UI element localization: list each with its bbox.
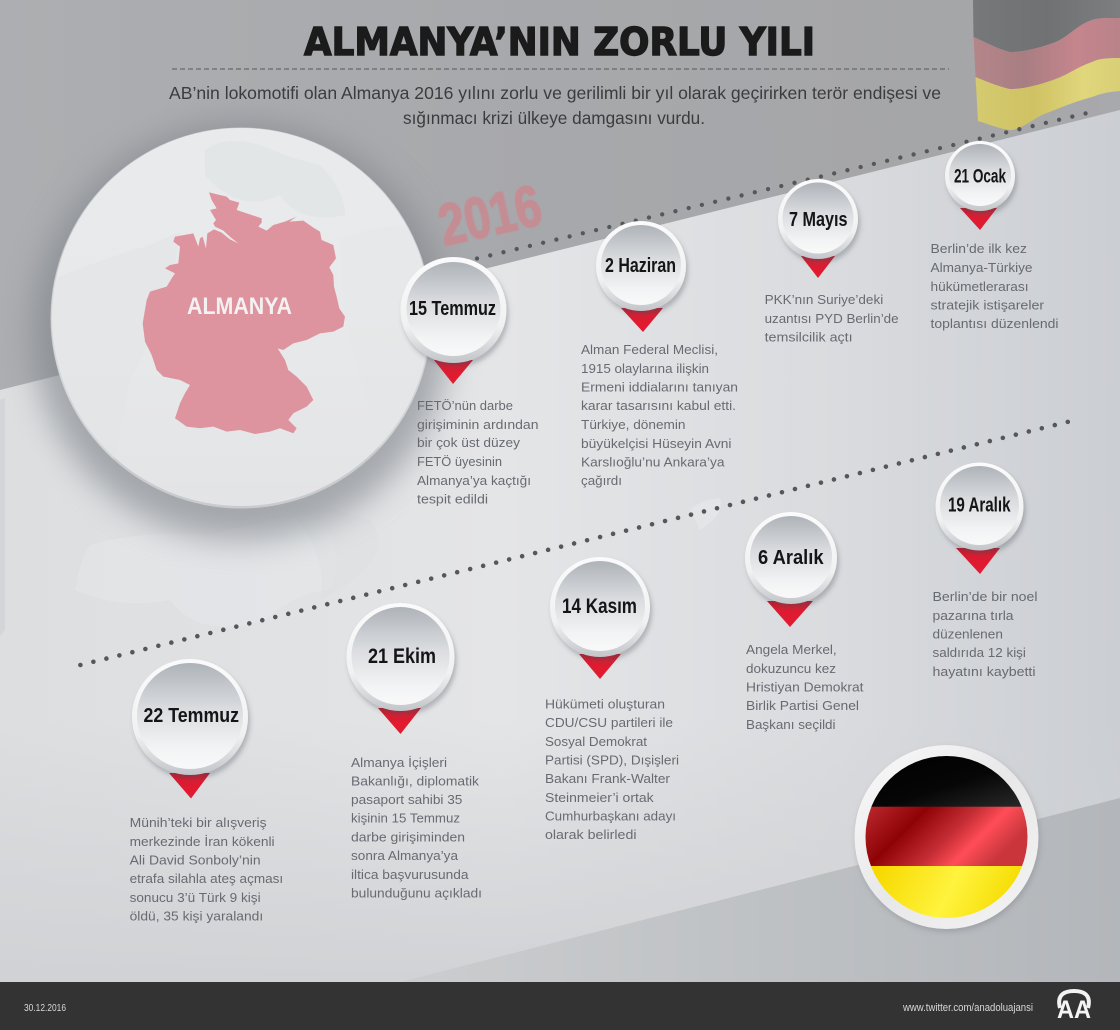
event: 7 Mayıs xyxy=(765,179,899,344)
event: 22 Temmuz: sonucu 3’ü Türk 9 kişi xyxy=(130,890,261,905)
event: 14 Kasım: olarak belirledi xyxy=(545,827,637,842)
event: 6 Aralık: dokuzuncu kez xyxy=(746,661,836,676)
event: 22 Temmuz: Ali David Sonboly’nin xyxy=(130,852,261,868)
event: 15 Temmuz: tespit edildi xyxy=(417,492,488,506)
event: 7 Mayıs: uzantısı PYD Berlin’de xyxy=(765,311,899,326)
event: 6 Aralık: 6 Aralık xyxy=(758,546,824,569)
event: 6 Aralık: Hristiyan Demokrat xyxy=(746,680,864,694)
event: 21 Ocak: 21 Ocak xyxy=(954,166,1006,188)
event: 6 Aralık xyxy=(745,512,864,732)
event: 2 Haziran: Türkiye, dönemin xyxy=(581,417,686,432)
event: 19 Aralık: 19 Aralık xyxy=(948,494,1011,516)
event: 15 Temmuz: FETÖ üyesinin xyxy=(417,454,502,469)
event: 19 Aralık: düzenlenen xyxy=(932,626,1003,642)
event: 6 Aralık: Angela Merkel, xyxy=(746,642,837,657)
event: 21 Ocak: stratejik istişareler xyxy=(930,298,1045,312)
event: 7 Mayıs: temsilcilik açtı xyxy=(765,330,853,344)
event: 2 Haziran: Karslıoğlu’nu Ankara’ya xyxy=(581,454,725,470)
subtitle xyxy=(169,83,941,128)
event: 14 Kasım: CDU/CSU partileri ile xyxy=(545,715,673,730)
event: 14 Kasım: Partisi (SPD), Dışişleri xyxy=(545,752,679,768)
map label: ALMANYA xyxy=(187,293,292,320)
event: 22 Temmuz: etrafa silahla ateş açması xyxy=(130,871,283,886)
logo: Anadolu Agency: AA xyxy=(1057,996,1091,1024)
event: 15 Temmuz: 15 Temmuz xyxy=(409,298,496,320)
event: 2 Haziran: çağırdı xyxy=(581,473,622,488)
event: 19 Aralık: hayatını kaybetti xyxy=(932,664,1036,679)
event: 2 Haziran: 2 Haziran xyxy=(605,254,676,277)
event: 21 Ekim: pasaport sahibi 35 xyxy=(351,792,462,807)
event: 2 Haziran xyxy=(581,221,738,488)
event: 15 Temmuz: girişiminin ardından xyxy=(417,417,538,432)
event: 22 Temmuz: merkezinde İran kökenli xyxy=(130,834,275,849)
footer bar xyxy=(0,982,1120,1030)
event: 14 Kasım: Cumhurbaşkanı adayı xyxy=(545,808,676,824)
event: 19 Aralık: saldırıda 12 kişi xyxy=(932,645,1026,660)
event: 21 Ekim: iltica başvurusunda xyxy=(351,867,469,882)
event: 7 Mayıs: 7 Mayıs xyxy=(789,209,848,231)
event: 21 Ekim: bulunduğunu açıkladı xyxy=(351,886,482,900)
icon: waving German flag xyxy=(973,0,1120,130)
event: 14 Kasım: Steinmeier’i ortak xyxy=(545,790,654,805)
event: 19 Aralık xyxy=(932,462,1038,679)
event: 21 Ocak: Berlin’de ilk kez xyxy=(930,241,1027,256)
subtitle: sığınmacı krizi ülkeye damgasını vurdu. xyxy=(403,108,705,128)
icon: round German flag badge xyxy=(854,745,1040,932)
event: 2 Haziran: Ermeni iddialarını tanıyan xyxy=(581,380,738,394)
event: 21 Ocak xyxy=(930,141,1059,331)
event: 2 Haziran: büyükelçisi Hüseyin Avni xyxy=(581,436,732,451)
event: 21 Ekim: Almanya İçişleri xyxy=(351,755,447,770)
event: 6 Aralık: Birlik Partisi Genel xyxy=(746,698,859,713)
event: 21 Ekim: darbe girişiminden xyxy=(351,830,465,844)
event: 15 Temmuz: FETÖ’nün darbe xyxy=(417,398,513,413)
title: ALMANYA’NIN ZORLU YILI xyxy=(304,20,815,65)
event: 6 Aralık: Başkanı seçildi xyxy=(746,717,836,732)
year label 2016: 2016 xyxy=(433,173,547,259)
event: 21 Ekim: sonra Almanya’ya xyxy=(351,848,459,863)
event: 21 Ekim: Bakanlığı, diplomatik xyxy=(351,774,480,788)
event: 14 Kasım: Bakanı Frank-Walter xyxy=(545,771,671,786)
event: 21 Ocak: toplantısı düzenlendi xyxy=(930,316,1059,331)
event: 14 Kasım: Hükümeti oluşturan xyxy=(545,696,665,712)
globe with drop shadow xyxy=(33,124,449,540)
event: 22 Temmuz: 22 Temmuz xyxy=(144,704,239,727)
event: 21 Ekim xyxy=(346,603,482,900)
event: 22 Temmuz: Münih’teki bir alışveriş xyxy=(130,815,267,830)
dotted line: upper timeline xyxy=(477,113,1089,258)
event: 15 Temmuz: bir çok üst düzey xyxy=(417,435,521,450)
event: 14 Kasım: 14 Kasım xyxy=(562,595,637,618)
event: 2 Haziran: karar tasarısını kabul etti. xyxy=(581,398,736,413)
event: 19 Aralık: Berlin’de bir noel xyxy=(932,589,1038,604)
event: 14 Kasım xyxy=(545,557,679,842)
event: 21 Ocak: Almanya-Türkiye xyxy=(930,260,1032,275)
event: 15 Temmuz xyxy=(400,257,538,506)
map: Germany xyxy=(143,192,345,434)
event: 21 Ekim: kişinin 15 Temmuz xyxy=(351,810,460,826)
subtitle: AB’nin lokomotifi olan Almanya 2016 yılını zorlu ve gerilimli bir yıl olarak geçirirken terör endişesi ve xyxy=(169,83,941,103)
event: 15 Temmuz: Almanya’ya kaçtığı xyxy=(417,473,531,488)
event: 21 Ocak: hükümetlerarası xyxy=(930,279,1028,294)
event: 19 Aralık: pazarına tırla xyxy=(932,608,1014,623)
event: 21 Ekim: 21 Ekim xyxy=(368,645,436,668)
footer date: 30.12.2016 xyxy=(24,1002,66,1014)
event: 2 Haziran: 1915 olaylarına ilişkin xyxy=(581,361,709,376)
event: 14 Kasım: Sosyal Demokrat xyxy=(545,734,647,749)
event: 22 Temmuz: öldü, 35 kişi yaralandı xyxy=(130,908,263,924)
dotted line: lower timeline xyxy=(80,419,1079,665)
footer twitter address: www.twitter.com/anadoluajansi xyxy=(902,1002,1033,1014)
event: 22 Temmuz xyxy=(130,659,283,924)
event: 7 Mayıs: PKK’nın Suriye’deki xyxy=(765,292,883,307)
event: 2 Haziran: Alman Federal Meclisi, xyxy=(581,342,718,357)
